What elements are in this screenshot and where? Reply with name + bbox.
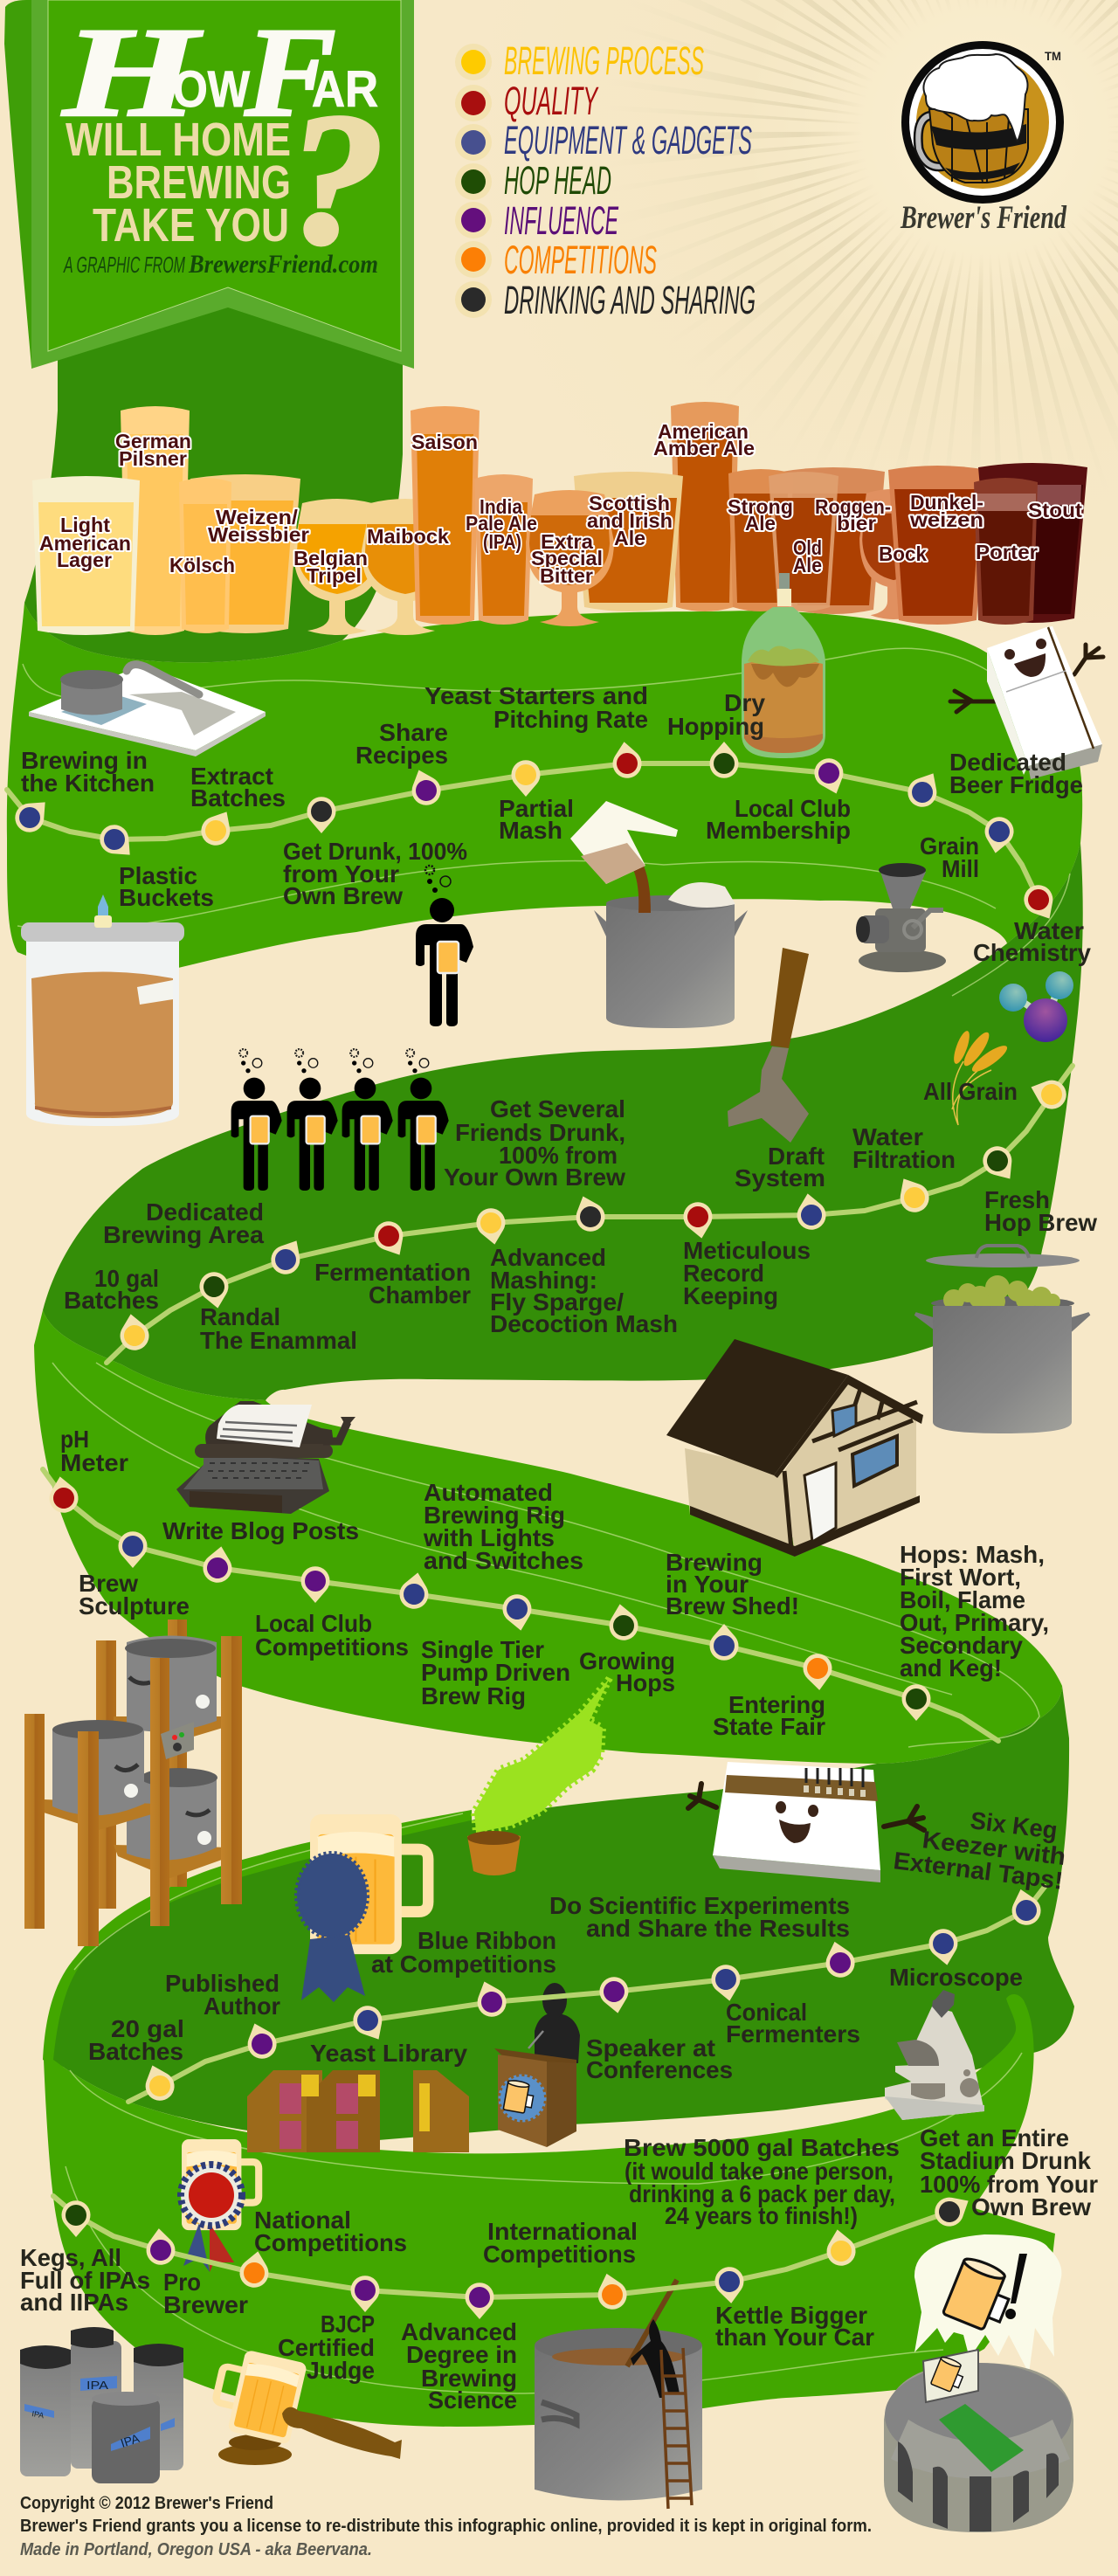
legend: influence: INFLUENCE [504, 198, 619, 243]
milestone labels band 2: Fresh [984, 1186, 1050, 1213]
progression line band 2 [107, 1066, 1073, 1363]
glass: Roggenbier [782, 467, 885, 614]
glass: Weizen [190, 474, 300, 633]
beer style labels: American [39, 532, 131, 555]
beer style labels: Scottish [589, 492, 670, 515]
milestone labels band 1: Plastic [119, 862, 197, 889]
ribbon band 4 outer bright strip [43, 1810, 472, 2070]
milestone labels band 2: Fermentation [314, 1259, 471, 1286]
legend: competitions [455, 238, 657, 282]
milestone labels band 3: Brew Rig [421, 1682, 526, 1709]
title script How Far: OW [173, 61, 250, 118]
title script How Far: AR [312, 61, 378, 118]
glass: Stout [978, 463, 1087, 623]
icon: four drunk friends [231, 1049, 449, 1191]
glass: Extra Special Bitter [526, 490, 614, 626]
ribbon band 1 [7, 603, 1082, 971]
milestone labels band 4: Microscope [889, 1964, 1023, 1991]
title question lines: TAKE YOU [93, 199, 289, 252]
beer style labels: Porter [976, 541, 1038, 563]
milestone labels band 1: Recipes [355, 742, 448, 769]
milestone labels band 5: and IIPAs [20, 2289, 128, 2316]
milestone labels band 5: Brewer [163, 2291, 248, 2318]
milestone labels band 4: Author [204, 1992, 280, 2020]
icon: stadium [884, 2350, 1073, 2532]
beer glasses row [32, 402, 1087, 635]
milestone labels band 3: Sculpture [79, 1592, 190, 1619]
glass: Old Ale [769, 472, 838, 611]
icon: brew shed house [666, 1339, 923, 1557]
milestone labels band 3: Single Tier [421, 1636, 544, 1663]
milestone labels band 2: Dedicated [146, 1198, 264, 1226]
beer style labels: Amber Ale [653, 437, 755, 459]
icon: smiling keezer [688, 1762, 924, 1882]
beer style labels: Weizen/ [216, 506, 299, 528]
glass: Strong Ale [728, 469, 793, 611]
milestone labels band 5: International [487, 2218, 638, 2245]
milestone labels band 5: BJCP [321, 2310, 375, 2338]
milestone labels band 2: 100% from [499, 1142, 618, 1169]
milestone labels band 3: Local Club [255, 1610, 372, 1637]
milestone labels band 2: Brewing Area [103, 1221, 264, 1248]
milestone labels band 2: System [735, 1164, 825, 1191]
ribbon band 2 [43, 843, 1083, 1400]
milestone labels band 1: Grain [920, 832, 979, 860]
milestone labels band 2: The Enammal [200, 1327, 357, 1354]
milestone labels band 1: Own Brew [283, 882, 403, 909]
icon: hop plant in pot [467, 1678, 610, 1875]
milestone labels band 5: drinking a 6 pack per day, [629, 2180, 895, 2207]
milestone labels band 5: Own Brew [971, 2193, 1091, 2220]
milestone labels band 2: 10 gal [94, 1265, 159, 1292]
milestone labels band 3: Competitions [255, 1633, 409, 1661]
milestone labels band 4: Fermenters [726, 2020, 860, 2048]
beer style labels: Ale [793, 554, 822, 577]
milestone labels band 1: Beer Fridge [949, 771, 1083, 798]
beer style labels: Ale [614, 527, 645, 549]
milestone labels band 5: Judge [307, 2357, 375, 2384]
milestone labels band 4: 20 gal [111, 2015, 184, 2042]
milestone labels band 1: Local Club [735, 795, 851, 822]
beer style labels: Kölsch [169, 554, 235, 577]
icon: typewriter [176, 1401, 355, 1514]
milestone labels band 5 [20, 2124, 1098, 2414]
beer style labels: Maibock [367, 525, 449, 548]
milestone labels band 3: Brew Shed! [666, 1592, 799, 1619]
milestone labels band 1: Dedicated [949, 749, 1066, 776]
milestone labels band 1: Mill [942, 855, 979, 882]
milestone labels band 3: Entering [728, 1691, 825, 1718]
beer style labels: (IPA) [483, 530, 521, 553]
beer style labels: Special [531, 547, 603, 570]
milestone labels band 3: pH [60, 1426, 89, 1453]
milestone labels band 1: Chemistry [973, 939, 1091, 966]
glass: Belgian Tripel [293, 499, 382, 635]
keg: left: IPA [31, 2409, 45, 2420]
milestone labels band 4 [88, 1806, 1067, 2083]
footer copyright: Made in Portland, Oregon USA - aka Beervana. [20, 2540, 372, 2559]
title question lines [66, 114, 291, 252]
icon: speech bubble with mug [914, 2234, 1061, 2373]
icon: blue ribbon mug [297, 1814, 428, 2002]
milestone labels band 5: Degree in [406, 2341, 517, 2368]
milestone labels band 3: Brew [79, 1570, 138, 1597]
beer style labels: Roggen- [815, 495, 891, 518]
milestone labels band 3: and Switches [424, 1547, 583, 1574]
glass: Porter [974, 478, 1038, 625]
beer style labels: Tripel [307, 564, 362, 587]
milestone pins band 1 [9, 740, 1062, 926]
milestone labels band 1 [21, 682, 1091, 966]
legend: competitions: COMPETITIONS [504, 238, 657, 282]
title question lines: WILL HOME [66, 114, 291, 166]
beer style labels: Lager [57, 549, 112, 571]
milestone labels band 3: Out, Primary, [900, 1609, 1049, 1636]
beer style labels: Bock [879, 542, 927, 565]
milestone labels band 1: Membership [706, 817, 851, 844]
milestone labels band 1: Batches [190, 784, 286, 811]
glass: Light American Lager [32, 476, 140, 635]
milestone labels band 3: Brewing [666, 1549, 763, 1576]
progression line band 1 [7, 763, 1039, 900]
progression line band 3 [43, 1469, 998, 1741]
milestone labels band 3: and Keg! [900, 1654, 1002, 1682]
glass: Dunkelweizen [888, 466, 987, 625]
milestone labels band 3: with Lights [423, 1524, 555, 1551]
glass: American Amber [671, 402, 739, 611]
logo: Brewer's Friend [900, 41, 1066, 236]
milestone labels band 4: and Share the Results [586, 1915, 850, 1942]
milestone labels band 4: Batches [88, 2038, 183, 2065]
legend: influence [455, 198, 619, 243]
title script How Far: F [244, 1, 336, 143]
milestone labels band 2: Water [852, 1123, 923, 1150]
icon: drunk person [416, 866, 473, 1026]
glass: Saison [411, 406, 480, 625]
milestone labels band 3: State Fair [713, 1713, 825, 1740]
legend: brewing process [455, 38, 704, 83]
glass: Scottish [574, 472, 683, 611]
milestone labels band 1: Pitching Rate [493, 706, 648, 733]
milestone labels band 5: Competitions [483, 2241, 636, 2268]
milestone labels band 4: at Competitions [371, 1951, 556, 1978]
milestone labels band 5: Advanced [401, 2318, 517, 2345]
icon: grain mill [856, 863, 946, 972]
keg: back: IPA [86, 2379, 108, 2392]
milestone labels band 1: Share [379, 719, 448, 746]
beer style labels: Extra [541, 530, 593, 553]
ribbon dark column under banner [24, 297, 403, 662]
keg: right [134, 2344, 183, 2470]
icon: judge gavel mug [210, 2345, 402, 2465]
icon: measuring cup pouring [570, 801, 678, 913]
icon: sink with pot [29, 665, 266, 756]
legend: quality [455, 79, 599, 123]
milestone pins band 4 [139, 1886, 1044, 2104]
milestone labels band 3: Hops: Mash, [900, 1541, 1045, 1568]
milestone labels band 5: Pro [163, 2269, 201, 2296]
milestone labels band 4: Blue Ribbon [418, 1927, 556, 1954]
icon: IPA kegs [20, 2327, 183, 2483]
title script How Far: H [60, 1, 204, 143]
milestone labels band 2: Hop Brew [984, 1209, 1097, 1236]
footer copyright: Brewer's Friend grants you a license to re-distribute this infographic online, provided it is kept in original form. [20, 2517, 872, 2536]
legend: hop head [455, 158, 611, 203]
milestone labels band 4: Conferences [586, 2056, 733, 2083]
milestone labels band 2: Batches [64, 1287, 159, 1314]
milestone labels band 2: Mashing: [490, 1267, 597, 1294]
milestone labels band 2: Fly Sparge/ [490, 1288, 624, 1316]
milestone labels band 1: the Kitchen [21, 770, 155, 797]
legend: brewing process: BREWING PROCESS [504, 38, 704, 83]
beer style labels: Dunkel- [910, 491, 983, 514]
milestone labels band 3: First Wort, [900, 1564, 1021, 1591]
legend: quality: QUALITY [504, 79, 599, 123]
title byline: BrewersFriend.com [188, 250, 378, 279]
icon: smiling beer fridge [950, 626, 1103, 779]
beer style labels: Belgian [293, 547, 368, 570]
milestone labels band 2: Get Several [490, 1095, 625, 1122]
glass: German Pilsner [121, 406, 190, 635]
beer style labels: Light [60, 514, 110, 536]
milestone labels band 1: from Your [283, 860, 399, 887]
milestone labels band 5: Brew 5000 gal Batches [624, 2134, 900, 2161]
milestone labels band 4: Six Keg [969, 1806, 1059, 1844]
milestone labels band 5: Full of IPAs [20, 2267, 150, 2294]
title byline: A GRAPHIC FROM [63, 252, 185, 278]
milestone labels band 1: Get Drunk, 100% [283, 838, 467, 865]
icon: microscope [885, 1990, 984, 2120]
beer style labels: India [480, 495, 522, 518]
beer style labels: weizen [909, 508, 983, 531]
beer style labels: German [115, 430, 191, 452]
milestone labels band 5: (it would take one person, [625, 2158, 894, 2185]
milestone labels band 2: Advanced [490, 1244, 606, 1271]
milestone labels band 5: Kettle Bigger [715, 2302, 867, 2329]
milestone labels band 5: Competitions [254, 2229, 407, 2256]
icon: water molecule [999, 971, 1073, 1042]
ribbon fold behind banner [4, 0, 35, 367]
milestone labels band 2: Meticulous [683, 1237, 811, 1264]
milestone labels band 5: Science [428, 2386, 517, 2414]
milestone pins band 5 [61, 2188, 976, 2319]
milestone labels band 2: All Grain [923, 1078, 1018, 1105]
beer style labels: Old [793, 536, 822, 559]
milestone labels band 3 [60, 1426, 1049, 1740]
beer style labels [39, 420, 1082, 587]
milestone labels band 5: Stadium Drunk [920, 2147, 1091, 2174]
milestone labels band 5: Kegs, All [20, 2244, 121, 2271]
milestone labels band 3: Growing [579, 1647, 675, 1675]
progression line band 4 [128, 1887, 1045, 2102]
milestone labels band 2: Decoction Mash [490, 1310, 678, 1337]
ribbon band 5 [44, 1994, 1055, 2427]
milestone labels band 2: Draft [768, 1143, 825, 1170]
milestone labels band 3: Write Blog Posts [162, 1517, 359, 1544]
legend: hop head: HOP HEAD [504, 158, 611, 203]
milestone labels band 5: 100% from Your [920, 2171, 1098, 2198]
milestone labels band 3: Boil, Flame [900, 1586, 1025, 1613]
milestone labels band 2: Keeping [683, 1282, 778, 1309]
milestone labels band 3: Hops [616, 1669, 675, 1696]
beer style labels: Bitter [540, 564, 593, 587]
icon: national ribbon mug [181, 2139, 259, 2272]
title banner [31, 0, 414, 369]
milestone labels band 3: in Your [666, 1571, 749, 1598]
glass: Kolsch [179, 478, 231, 633]
icon: speaker at podium [494, 1983, 580, 2147]
milestone labels band 5: Get an Entire [920, 2124, 1069, 2151]
title question mark: ? [288, 74, 384, 283]
milestone pins band 2 [116, 1074, 1070, 1352]
title byline [63, 250, 378, 279]
milestone labels band 4: Published [165, 1970, 280, 1997]
milestone labels band 3: Meter [60, 1449, 128, 1476]
footer copyright: Copyright © 2012 Brewer's Friend [20, 2494, 273, 2513]
footer copyright [20, 2494, 872, 2559]
beer style labels: Pale Ale [466, 512, 537, 535]
milestone labels band 4: External Taps! [892, 1847, 1065, 1895]
logo: Brewer's Friend: Brewer's Friend [900, 200, 1066, 236]
milestone labels band 3: Secondary [900, 1632, 1023, 1659]
legend: drinking and sharing [455, 278, 756, 322]
beer style labels: and Irish [587, 509, 673, 532]
milestone labels band 1: Yeast Starters and [424, 682, 648, 709]
sun rays behind logo [736, 0, 1118, 380]
milestone labels band 3: Pump Driven [421, 1659, 570, 1686]
milestone labels band 4: Keezer with [921, 1826, 1067, 1870]
legend: drinking and sharing: DRINKING AND SHARING [504, 278, 756, 322]
title question lines: BREWING [107, 156, 291, 209]
milestone labels band 4: Do Scientific Experiments [549, 1892, 850, 1919]
milestone labels band 4: Conical [726, 1999, 807, 2026]
icon: yeast library bookshelves [247, 2070, 469, 2152]
milestone labels band 2: Your Own Brew [444, 1164, 625, 1191]
beer style labels: Stout [1028, 499, 1082, 521]
icon: dry-hopping carboy [742, 573, 825, 758]
milestone labels band 5: than Your Car [715, 2324, 874, 2351]
beer style labels: Ale [745, 512, 776, 535]
beer style labels: Saison [411, 431, 478, 453]
keg: front [92, 2392, 160, 2483]
milestone labels band 1: Dry [724, 689, 765, 716]
milestone labels band 1: Brewing in [21, 747, 148, 774]
beer style labels: Strong [728, 495, 793, 518]
legend: equipment and gadgets [455, 118, 752, 162]
milestone labels band 2: Record [683, 1260, 764, 1287]
milestone labels band 1: Buckets [119, 884, 214, 911]
milestone labels band 2: Friends Drunk, [455, 1119, 625, 1146]
beer style labels: bier [837, 512, 876, 535]
milestone labels band 1: Extract [190, 763, 273, 790]
icon: brew sculpture rig [24, 1619, 242, 1946]
glass: Bock [859, 489, 928, 619]
ribbon band 3 [34, 1310, 1062, 1764]
progression line band 5 [53, 2196, 949, 2297]
milestone pins band 3 [45, 1474, 930, 1721]
legend: equipment and gadgets: EQUIPMENT & GADGETS [504, 118, 752, 162]
glass: IPA [474, 474, 533, 625]
milestone labels band 1: Hopping [667, 713, 764, 740]
milestone labels band 4: Speaker at [586, 2034, 715, 2061]
icon: hop pot with lid [915, 1246, 1089, 1433]
milestone labels band 1: Partial [499, 795, 574, 822]
ribbon band 4 [53, 1686, 1074, 2140]
milestone labels band 5: Brewing [421, 2365, 517, 2392]
icon: pot being filled [594, 882, 748, 1028]
icon: wheat [951, 1029, 1011, 1125]
milestone labels band 5: National [254, 2207, 351, 2234]
milestone labels band 2 [64, 1078, 1097, 1354]
milestone labels band 3: Brewing Rig [424, 1502, 565, 1529]
icon: draft tap [728, 948, 809, 1143]
keg: back [71, 2327, 121, 2469]
title script How Far [60, 1, 378, 143]
milestone labels band 2: Filtration [852, 1146, 956, 1173]
milestone labels band 2: Randal [200, 1303, 280, 1330]
beer style labels: American [658, 420, 749, 443]
glass: Maibock [362, 499, 450, 635]
milestone labels band 3: Automated [424, 1479, 553, 1506]
icon: plastic bucket fermenter [21, 894, 184, 1126]
milestone labels band 4: Yeast Library [310, 2040, 467, 2067]
milestone labels band 2: Chamber [369, 1281, 471, 1309]
milestone labels band 5: Certified [278, 2334, 375, 2361]
milestone labels band 5: 24 years to finish!) [665, 2202, 858, 2229]
beer style labels: Weissbier [208, 523, 309, 546]
milestone labels band 1: Water [1014, 917, 1084, 944]
legend [455, 38, 756, 322]
icon: big kettle with brewer on ladder [535, 2280, 702, 2509]
logo: Brewer's Friend: TM [1045, 49, 1061, 63]
beer style labels: Pilsner [119, 447, 187, 470]
milestone labels band 1: Mash [499, 817, 562, 844]
keg: front: IPA [119, 2431, 141, 2450]
keg: left [20, 2345, 71, 2476]
